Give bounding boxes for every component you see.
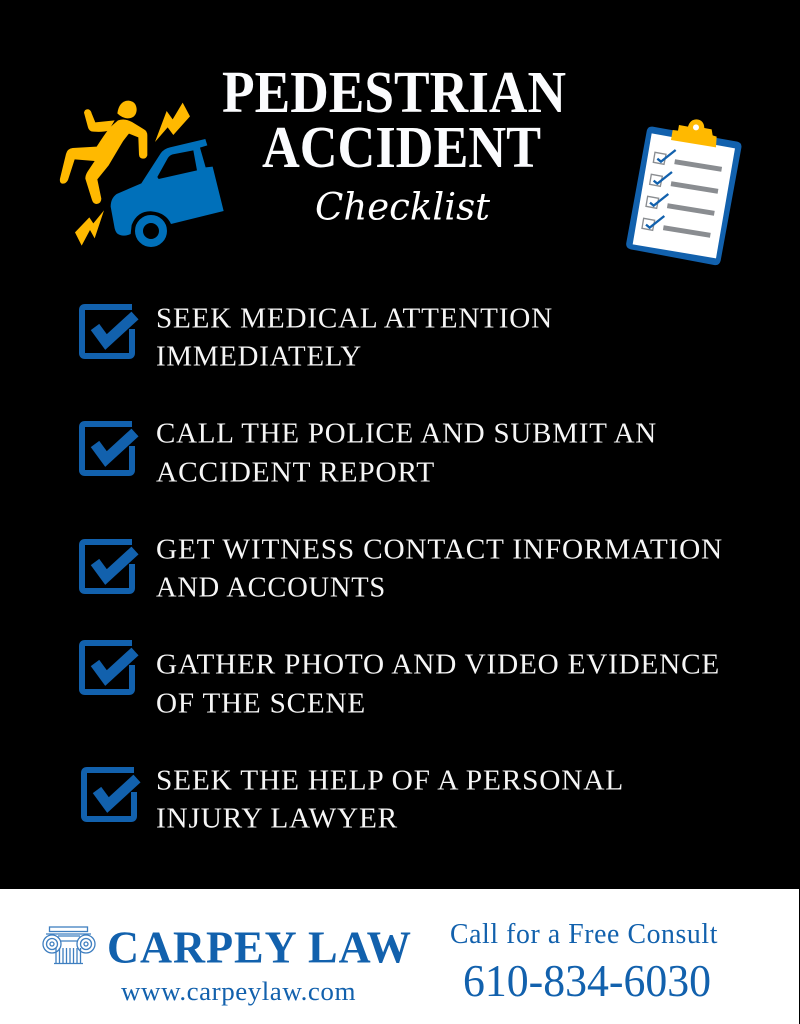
icon: clipboard: [626, 119, 741, 265]
icon: blue car: [111, 139, 224, 236]
item text: [156, 418, 657, 488]
logo wordmark: CARPEY LAW: [107, 922, 412, 973]
item text: GATHER PHOTO AND VIDEO EVIDENCE: [156, 648, 720, 680]
icon: lightning lower: [75, 210, 104, 246]
item text: OF THE SCENE: [156, 688, 366, 720]
phone number: 610-834-6030: [463, 955, 711, 1006]
item text: SEEK THE HELP OF A PERSONAL: [156, 764, 624, 796]
item text: [156, 764, 624, 834]
call to action: Call for a Free Consult: [450, 919, 718, 950]
icon: checkbox: [82, 542, 135, 591]
icon: person struck by car: [60, 101, 224, 246]
clipboard board: [626, 127, 741, 265]
icon: checkbox: [82, 424, 135, 473]
checklist item 5: [84, 764, 624, 834]
icon: column logo: [43, 927, 95, 964]
title: PEDESTRIAN: [222, 59, 566, 125]
item text: ACCIDENT REPORT: [156, 456, 435, 488]
icon: checkbox: [84, 770, 137, 819]
title: [222, 59, 566, 228]
item text: [156, 648, 720, 720]
item text: [156, 534, 723, 604]
footer panel: [0, 889, 799, 1024]
title: Checklist: [315, 186, 490, 228]
clipboard paper: [633, 133, 735, 258]
checklist rows: [663, 162, 722, 235]
website: www.carpeylaw.com: [121, 977, 356, 1006]
checklist item 4: [82, 643, 720, 720]
icon: falling person: [60, 101, 147, 204]
clipboard clip: [671, 119, 717, 147]
item text: GET WITNESS CONTACT INFORMATION: [156, 534, 723, 566]
item text: [156, 302, 553, 372]
checklist item 3: [82, 534, 723, 604]
icon: checkbox: [82, 643, 135, 692]
item text: AND ACCOUNTS: [156, 572, 386, 604]
item text: SEEK MEDICAL ATTENTION: [156, 302, 553, 334]
title: ACCIDENT: [262, 114, 541, 180]
item text: INJURY LAWYER: [156, 802, 398, 834]
icon: car wheel: [139, 219, 163, 243]
item text: IMMEDIATELY: [156, 340, 362, 372]
checklist item 1: [82, 302, 553, 372]
icon: checkbox: [82, 307, 135, 356]
item text: CALL THE POLICE AND SUBMIT AN: [156, 418, 657, 450]
icon: lightning upper: [155, 103, 190, 142]
checklist item 2: [82, 418, 657, 488]
